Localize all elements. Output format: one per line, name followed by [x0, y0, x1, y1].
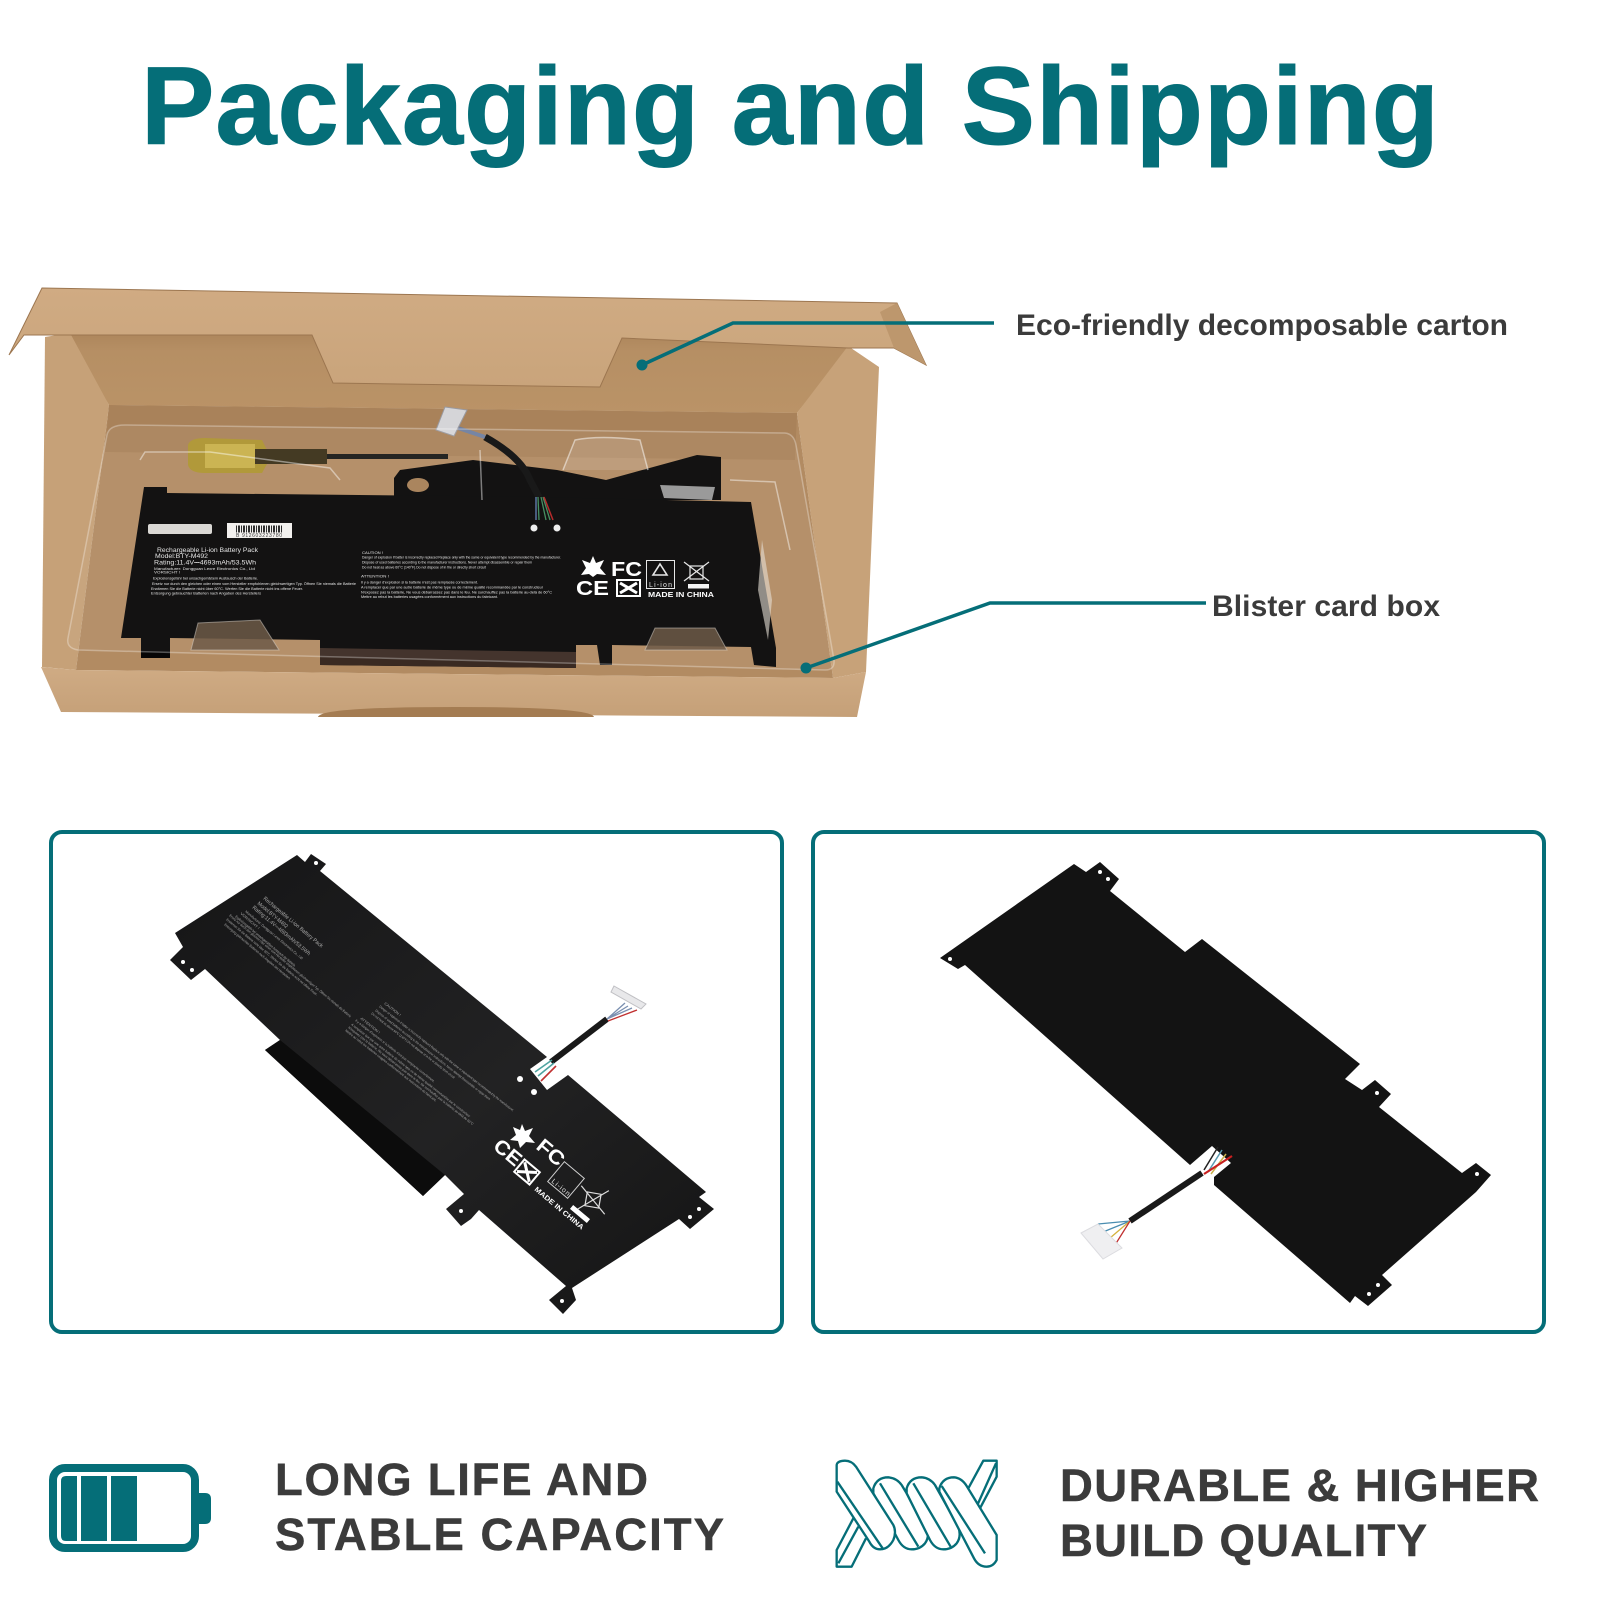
arrow: blister callout line — [800, 603, 1206, 674]
carton back wall — [60, 325, 860, 413]
compliance icons: FC — [611, 559, 642, 581]
front label text: Dispose of used batteries according to the manufacturer instructions. Never attempt disassemble or repair them — [374, 1009, 491, 1101]
German text block: Erwärmen Sie die Batterie nicht über 60°C. Werfen Sie die Batterie nicht ins offene Feuer. — [151, 587, 303, 591]
English and French text block — [361, 551, 561, 599]
English and French text block: Mettre au rebut les batteries usagées conformément aux instructions du fabricant. — [361, 595, 498, 599]
callout: carton: Eco-friendly decomposable carton — [1016, 309, 1508, 342]
front label text — [223, 896, 515, 1126]
panel: battery back view — [813, 832, 1544, 1332]
terminal screws — [530, 524, 560, 532]
mounting holes — [181, 861, 701, 1303]
blister tray — [68, 425, 834, 670]
German text block — [151, 547, 356, 596]
front label text: Ersetz nur durch den gleichen oder einen vom Hersteller empfohlenen gleichwertigen Typ. Öffnen Sie niemals die Batterie — [228, 914, 352, 1018]
English and French text block: Il y a danger d'explosion si la batterie n'est pas remplacée correctement. — [361, 580, 478, 584]
front compliance icons — [489, 1124, 609, 1231]
panel: open carton with battery — [9, 288, 926, 717]
front label text: VORSICHT ! — [239, 912, 260, 930]
carton left wall — [42, 333, 109, 670]
battery front body — [170, 854, 714, 1314]
feature text: long life — [275, 1454, 724, 1560]
German text block: VORSICHT ! — [154, 570, 180, 574]
feature text: long life: STABLE CAPACITY — [275, 1509, 724, 1560]
front label text: Rating:11.4V⎓4693mAh/53.5Wh — [251, 905, 311, 957]
icon: twisted wire — [837, 1461, 997, 1567]
battery in blister — [121, 407, 776, 668]
front label text: Entsorgung gebrauchter Batterien nach Angaben des Herstellers — [223, 923, 291, 981]
German text block: Entsorgung gebrauchter Batterien nach Angaben des Herstellers — [151, 592, 261, 596]
front label text: A remplacer que par une autre batterie de même type ou de même qualité recommandée par le constructeur — [350, 1023, 472, 1119]
front compliance icons: CE — [489, 1135, 526, 1171]
compliance icons — [576, 556, 714, 600]
German text block: Ersetz nur durch den gleichen oder einen vom Hersteller empfohlenen gleichwertigen Typ. Öffnen Sie niemals die Batterie — [152, 582, 356, 586]
mounting holes — [948, 870, 1479, 1296]
front label text: Mettre au rebut les batteries usagées conformément aux instructions du fabricant. — [344, 1029, 438, 1103]
feature text: durable: DURABLE & HIGHER — [1060, 1460, 1539, 1511]
back cable — [1081, 1147, 1232, 1259]
panel: battery front view — [51, 832, 782, 1332]
carton right wall — [797, 346, 879, 678]
English and French text block: N'exposez pas la batterie, Ne vous débarrassez pas dans le feu. Ne surchauffez pas la batterie au-delà de 60°C — [361, 590, 553, 594]
German text block: Model:BTY-M492 — [155, 553, 208, 560]
front label text: ATTENTION ! — [359, 1017, 381, 1035]
front label text: Manufacturer: Dongguan Lexre Electronics Co., Ltd — [244, 910, 304, 960]
compliance icons: MADE IN CHINA — [648, 592, 714, 599]
compliance icons: Li-ion — [649, 582, 672, 589]
front label text: Danger of explosion if batter is incorrectly replaced Replace only with the same or equivalent type recommended by the manufacturer. — [378, 1005, 515, 1113]
barcode sticker: B 912603223780 — [236, 533, 282, 539]
dark behind part of battery — [394, 455, 721, 500]
English and French text block: Danger of explosion if batter is incorrectly replaced Replace only with the same or equivalent type recommended by the manufacturer. — [362, 556, 561, 560]
front compliance icons: Li-ion — [550, 1178, 571, 1198]
battery back body — [940, 862, 1491, 1306]
front label text: Model:BTY-M492 — [256, 901, 289, 930]
front label text: Il y a danger d'explosion si la batterie n'est pas remplacée correctement. — [354, 1019, 436, 1083]
arrow: carton callout line — [636, 323, 994, 370]
German text block: Manufacturer: Dongguan Lexre Electronics Co., Ltd — [154, 567, 255, 571]
front label text: Erwärmen Sie die Batterie nicht über 60°C. Werfen Sie die Batterie nicht ins offene Feuer. — [225, 918, 318, 997]
front label text: CAUTION ! — [383, 1002, 402, 1017]
label sticker — [148, 524, 212, 534]
feature text: durable: BUILD QUALITY — [1060, 1515, 1427, 1566]
compliance icons: CE — [576, 578, 609, 600]
English and French text block: ATTENTION ! — [361, 574, 389, 578]
front compliance icons: MADE IN CHINA — [533, 1186, 585, 1231]
battery cable — [436, 407, 553, 520]
front label text: Explosionsgefahr bei unsachgemäßem Austausch der Batterie. — [234, 915, 297, 968]
callout: blister: Blister card box — [1212, 590, 1440, 623]
battery bottom strip — [320, 648, 576, 668]
feature text: durable — [1060, 1460, 1539, 1566]
screwdriver — [188, 438, 448, 473]
feature text: long life: LONG LIFE AND — [275, 1454, 648, 1505]
carton lid with tab — [9, 288, 926, 387]
title: Packaging and Shipping — [141, 45, 1439, 168]
carton floor — [76, 405, 833, 678]
German text block: Rechargeable Li-ion Battery Pack — [157, 547, 259, 554]
German text block: Explosionsgefahr bei unsachgemäßem Austausch der Batterie. — [153, 576, 258, 580]
front thumb notch — [318, 707, 594, 717]
front label text: Do not heat as above 60°C (140°F).Do not dispose of in fire or directly short circuit — [370, 1012, 456, 1079]
English and French text block: A remplacer que par une autre batterie de même type ou de même qualité recommandée par le constructeur — [361, 586, 544, 590]
icon: battery — [53, 1468, 211, 1548]
barcode sticker — [227, 523, 292, 539]
front compliance icons: FC — [532, 1135, 569, 1171]
English and French text block: Do not heat as above 60°C (140°F).Do not dispose of in fire or directly short circuit — [362, 566, 486, 570]
front cable — [535, 986, 646, 1081]
carton front wall — [41, 667, 866, 717]
English and French text block: CAUTION ! — [362, 551, 383, 555]
front label text: Rechargeable Li-ion Battery Pack — [262, 896, 324, 950]
German text block: Rating:11.4V⎓4693mAh/53.5Wh — [154, 560, 256, 566]
front label text: N'exposez pas la batterie, Ne vous débarrassez pas dans le feu. Ne surchauffez pas la batterie au-delà de 60°C — [347, 1026, 475, 1126]
English and French text block: Dispose of used batteries according to the manufacturer instructions. Never attempt disassemble or repair them — [362, 560, 532, 564]
